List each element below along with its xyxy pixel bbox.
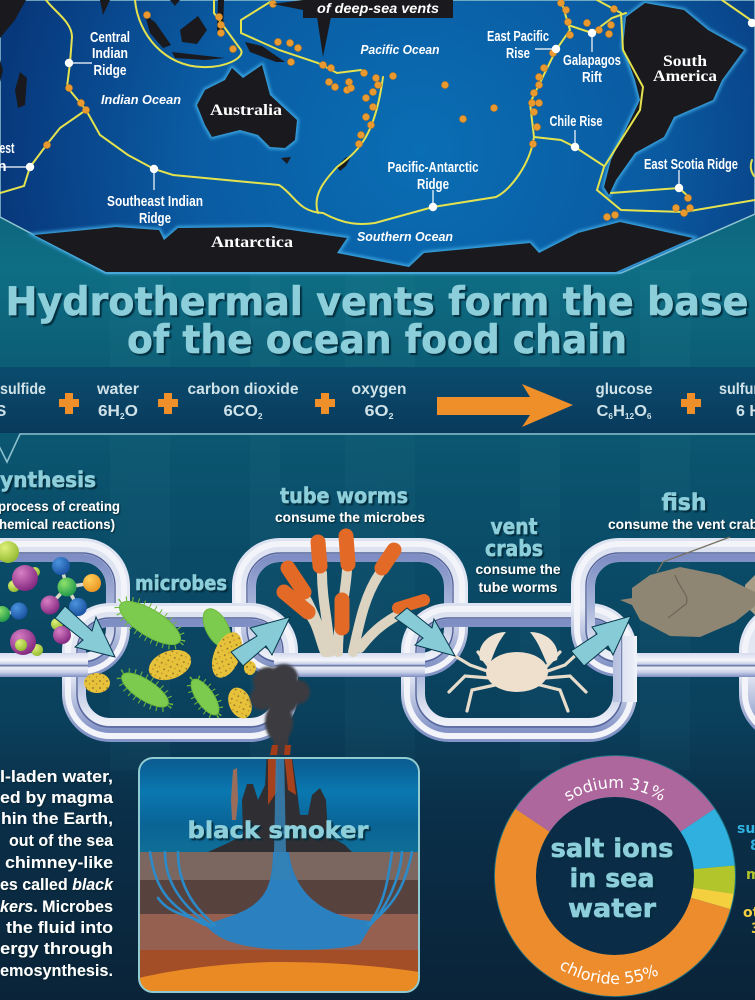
map labels: Indian Ocean	[101, 92, 181, 107]
equation terms: glucose	[596, 381, 653, 398]
icon: vent crab	[449, 632, 586, 711]
South America	[604, 3, 744, 195]
label: black smoker: black smoker	[188, 818, 369, 844]
rock layers	[139, 852, 419, 882]
heading: chemosynthesis: process of creating	[0, 498, 120, 514]
green rod microbes	[112, 592, 237, 719]
equation terms: sulfide	[0, 381, 46, 398]
title: of the ocean food chain	[127, 318, 627, 363]
Africa	[0, 0, 26, 38]
map labels: Antarctica	[211, 234, 293, 251]
equation terms: O	[634, 403, 647, 420]
smoke plume	[250, 664, 310, 755]
curved segment labels: chloride 55%	[560, 962, 658, 984]
equation terms: 12	[625, 412, 635, 421]
heading: chemosynthesis: hemical reactions)	[0, 516, 115, 532]
continents	[0, 0, 744, 272]
text block: black smoker explanation: l-laden water,	[0, 768, 113, 786]
labels: food chain: tube worms	[280, 484, 408, 508]
donut centre title: water	[568, 894, 656, 924]
sodium segment	[516, 756, 714, 832]
icon: tube worms	[284, 536, 424, 652]
yellow speckled microbes	[84, 628, 256, 722]
panel: chemosynthesis equation band	[0, 367, 755, 462]
equation terms: oxygen	[352, 381, 406, 398]
map labels: Ridge	[139, 210, 171, 227]
equation terms: C	[596, 403, 608, 420]
labels: food chain: tube worms	[478, 579, 558, 595]
curved segment labels	[560, 778, 664, 984]
map labels: East Pacific	[487, 28, 549, 45]
world map	[0, 0, 755, 273]
arrow: chemicals to microbes	[55, 606, 115, 657]
text block: black smoker explanation: ed by magma	[0, 789, 114, 807]
panel border	[139, 758, 419, 992]
equation terms: 6CO	[224, 403, 256, 420]
chain overlapping bars	[0, 636, 755, 702]
map labels: Rise	[506, 45, 530, 62]
heading: chemosynthesis: ynthesis	[0, 468, 96, 492]
map labels: Southern Ocean	[357, 229, 453, 244]
vent dots	[43, 0, 694, 221]
bracket line with pointer	[0, 434, 755, 462]
equation terms: 6	[647, 412, 652, 421]
equation terms: O	[125, 403, 138, 420]
magnesium segment	[693, 866, 735, 894]
chain link C	[238, 544, 462, 671]
equation terms: carbon dioxide	[188, 381, 299, 398]
icon: fish	[620, 537, 755, 637]
Sumatra	[145, 15, 171, 48]
islands	[170, 0, 180, 6]
chloride segment	[495, 809, 730, 996]
other ions segment	[691, 888, 734, 909]
map labels: Galapagos	[563, 52, 621, 69]
ridge markers	[0, 19, 755, 211]
chain link E	[577, 544, 755, 671]
equation terms	[0, 381, 755, 421]
side labels: su	[737, 821, 755, 837]
Madagascar	[15, 72, 27, 108]
labels: food chain: fish	[662, 490, 706, 516]
Tasmania	[281, 157, 291, 164]
labels: food chain: consume the	[476, 561, 561, 577]
Borneo	[180, 16, 207, 44]
donut backing	[494, 755, 736, 997]
chain link A	[0, 544, 124, 671]
map labels: Southeast Indian	[107, 193, 203, 210]
labels: food chain: microbes	[135, 571, 227, 595]
text block: black smoker explanation	[0, 768, 114, 980]
map labels: Rift	[582, 69, 602, 86]
callout: locations of deep-sea vents: of deep-sea vents	[317, 0, 439, 16]
donut centre title: salt ions	[550, 834, 674, 864]
ridge lines	[0, 0, 755, 224]
map labels: South	[663, 53, 707, 70]
equation terms: 6	[608, 412, 614, 421]
icon: microbes	[84, 592, 256, 722]
hydrothermal water channels	[205, 852, 374, 950]
map labels: America	[653, 68, 717, 85]
equation terms: 2	[120, 412, 125, 421]
map ocean	[0, 0, 755, 273]
labels: food chain	[135, 484, 755, 595]
New Zealand	[337, 155, 352, 171]
arrow: crabs to fish	[571, 616, 631, 666]
text block: black smoker explanation: chimney-like	[5, 854, 113, 872]
tube worm stalks	[305, 570, 398, 652]
text block: black smoker explanation: out of the sea	[9, 832, 114, 850]
map labels: Pacific-Antarctic	[388, 159, 478, 176]
chart: salt ions in sea water donut	[494, 755, 755, 997]
map labels: Ridge	[94, 62, 126, 79]
reaction arrow	[437, 384, 573, 427]
text block: black smoker explanation: the fluid into	[6, 919, 113, 937]
text block: black smoker explanation: kers. Microbes	[0, 898, 113, 916]
text block: black smoker explanation: es called black	[0, 876, 114, 894]
Australia	[197, 65, 297, 148]
plus signs	[59, 393, 701, 414]
equation terms: 2	[258, 412, 263, 421]
map labels: Australia	[210, 102, 282, 119]
land glow	[34, 3, 744, 272]
callout: locations of deep-sea vents	[273, 0, 453, 57]
donut centre title: in sea	[570, 864, 654, 894]
map labels: Chile Rise	[550, 113, 602, 130]
labels: food chain: crabs	[485, 537, 543, 562]
map labels: Ridge	[417, 176, 449, 193]
map labels: Indian	[92, 45, 128, 62]
panel: black smoker diagram	[139, 664, 419, 992]
side labels	[737, 821, 755, 937]
chain link B	[68, 609, 292, 736]
Antarctica	[34, 222, 693, 272]
arrow: tube worms to crabs	[395, 608, 455, 656]
equation terms: 6O	[364, 403, 386, 420]
icon: chemical molecules	[0, 541, 101, 656]
map labels: Central	[90, 29, 130, 46]
map labels: Pacific Ocean	[360, 42, 440, 57]
chain link D	[407, 609, 631, 736]
food chain links	[0, 544, 755, 736]
equation terms: 6H	[98, 403, 118, 420]
arrow: microbes to tube worms	[231, 617, 290, 666]
donut centre title	[550, 834, 674, 924]
curved segment labels: sodium 31%	[565, 778, 664, 801]
heading: chemosynthesis	[0, 468, 120, 532]
labels: food chain: vent	[490, 515, 538, 540]
text block: black smoker explanation: hin the Earth,	[1, 810, 113, 828]
equation terms: water	[96, 381, 139, 398]
vent chimneys	[208, 750, 352, 852]
equation terms: H	[613, 403, 625, 420]
text block: black smoker explanation: emosynthesis.	[0, 962, 113, 980]
equation terms: 2	[388, 412, 394, 421]
labels: food chain: consume the microbes	[275, 509, 425, 525]
New Guinea	[245, 42, 285, 62]
food chain arrows	[55, 606, 631, 666]
sea water	[139, 758, 419, 854]
chain link F	[745, 609, 755, 736]
title	[6, 280, 748, 363]
title: Hydrothermal vents form the base	[6, 280, 748, 325]
map labels	[0, 28, 738, 251]
map labels: est	[0, 140, 14, 157]
text block: black smoker explanation: ergy through	[0, 940, 113, 958]
magma	[139, 962, 419, 992]
sulfate segment	[680, 809, 734, 869]
tube worm plumes	[284, 536, 424, 628]
light rays	[110, 270, 690, 770]
